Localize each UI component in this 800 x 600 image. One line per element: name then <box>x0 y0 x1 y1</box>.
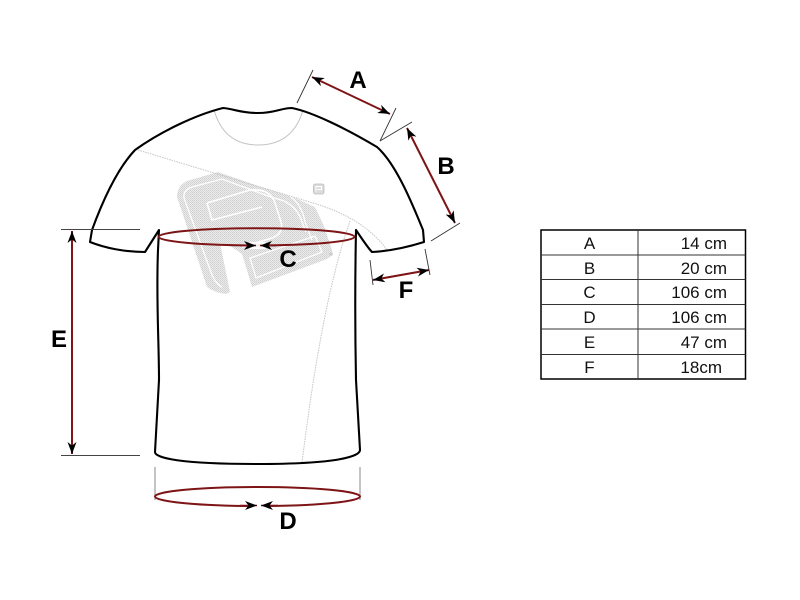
dimension B <box>380 122 460 241</box>
row E: 47 cm <box>681 333 727 352</box>
small chest logo <box>314 184 324 194</box>
row A <box>584 234 727 253</box>
row B <box>584 259 727 278</box>
dimension D <box>155 467 360 535</box>
row E <box>584 333 727 352</box>
measurements table <box>541 230 746 379</box>
dimension E <box>51 230 140 456</box>
dimension C <box>158 228 354 273</box>
row C: C <box>583 283 596 302</box>
dimension F <box>370 249 430 304</box>
dimension F: F <box>399 277 413 304</box>
row C <box>583 283 727 302</box>
t-shirt print logo <box>177 172 333 294</box>
dimension B: B <box>437 153 455 180</box>
collar seam <box>214 110 303 145</box>
dimension C: C <box>279 246 297 273</box>
dimension A: A <box>349 67 367 94</box>
row F: F <box>584 358 595 377</box>
row D: 106 cm <box>671 308 727 327</box>
row A: A <box>584 234 596 253</box>
row C: 106 cm <box>671 283 727 302</box>
row F: 18cm <box>680 358 722 377</box>
row F <box>584 358 722 377</box>
row D <box>583 308 727 327</box>
row E: E <box>584 333 595 352</box>
row D: D <box>583 308 596 327</box>
dimension A <box>297 67 396 141</box>
dimension E: E <box>51 326 67 353</box>
t-shirt outline <box>90 108 424 464</box>
raglan seam lines <box>138 150 387 463</box>
row B: B <box>584 259 595 278</box>
dimension D: D <box>279 508 297 535</box>
row A: 14 cm <box>681 234 727 253</box>
row B: 20 cm <box>681 259 727 278</box>
